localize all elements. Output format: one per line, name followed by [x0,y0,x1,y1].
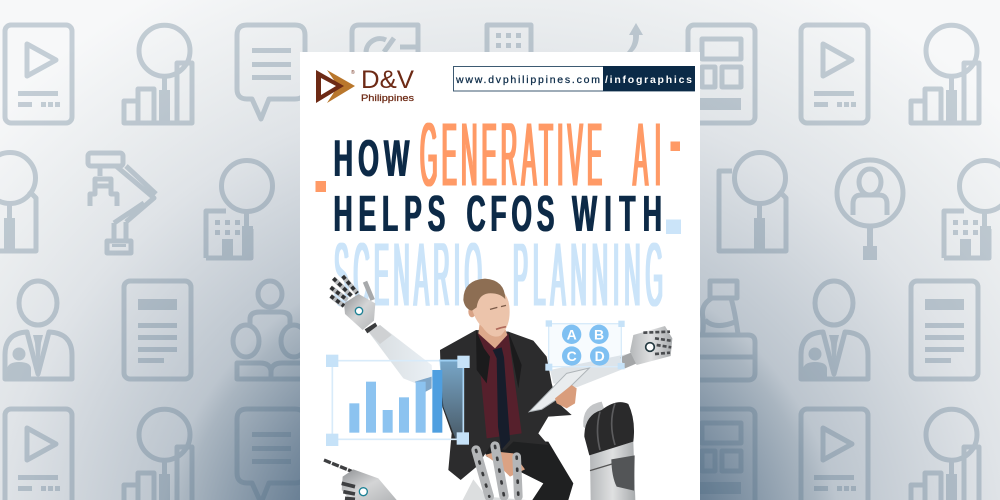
icon: target card, top centre [352,25,418,52]
icon: video document, row 4 [5,409,72,500]
icon: magnifier building, right [944,160,1000,260]
icon: magnifier building [206,160,272,260]
accent square: orange left [316,181,326,192]
title: AI: AI [633,105,661,205]
icon: growth arrow, top centre [626,23,643,53]
icon: business person, right [801,281,868,379]
title [334,105,663,325]
option D: D [595,348,605,364]
chart handles [326,355,470,446]
icon: layout document, row 1 [688,25,755,123]
logo: D&V Philippines [316,66,414,104]
url text: www.dvphilippines.com [455,74,600,86]
chart: scenario bar chart [326,355,470,446]
tie [493,347,510,450]
chart frame [332,361,463,439]
title: CFOS: CFOS [466,185,554,242]
lapels [476,330,522,388]
tablet and hand [529,368,589,412]
ear [468,306,476,317]
icon: building, top centre [487,25,531,52]
title: WITH: WITH [572,185,662,242]
bars [349,370,442,433]
icon: magnifier bar chart, row 1 right [911,25,979,125]
title: PLANNING: PLANNING [513,225,663,325]
icon: layout document, row 4 [688,409,755,500]
icon: text document [124,281,191,379]
robot hand: centre bottom [463,446,527,500]
accent square: orange right [670,142,680,151]
eyes and mouth [490,305,506,309]
icon: robot arm [88,153,156,253]
icon: magnifier bar chart, row 4 [124,409,192,500]
icon: speech bubble, row 4 [237,409,305,500]
icon: magnifier document, row 2 right [719,152,786,251]
face [470,287,510,337]
icon: business person [5,281,72,379]
title: HOW: HOW [334,128,410,187]
option C: C [567,348,577,364]
robot hand: pointing bottom left [324,460,397,500]
icon: video document, row 1 [5,25,72,123]
icon: speech bubble, row 1 [237,25,305,119]
jacket [440,330,572,480]
icon: magnifier document, row 2 left [0,152,36,251]
option B: B [594,326,604,342]
logo wordmark: D&V [361,66,414,94]
shirt [477,333,522,438]
title: HELPS: HELPS [334,185,445,242]
robot arm: upper left [331,276,433,394]
option A: A [567,326,577,342]
robot arm: right [550,326,672,387]
logo subtitle: Philippines [361,93,414,104]
icon: video document, row 4 right [801,409,868,500]
photo illustration: businessman with robot arms [324,276,672,500]
icon: team of people [233,281,307,379]
icon: video document, row 1 right [801,25,868,123]
chart overlay on jacket [439,359,464,440]
registered mark: ® [351,69,355,76]
hair [463,279,505,311]
icon: text document, right [911,281,978,379]
icon: logo arrows [316,70,355,103]
neck [478,320,507,348]
url box [454,66,695,91]
businessman [440,279,573,500]
title: GENERATIVE: GENERATIVE [420,105,602,205]
accent square: light blue [666,220,681,234]
title: SCENARIO: SCENARIO [334,225,482,325]
icon: magnifier bar chart, row 1 [124,25,192,125]
hand on knee [485,452,525,477]
multiple choice panel: A B C D [545,320,625,371]
icon: magnifier bar chart, row 4 right [911,409,979,500]
trousers [480,440,573,500]
panel: infographic page [300,52,700,500]
icon: magnifier person [837,160,903,260]
url path text: /infographics [605,74,692,86]
icon: hand on card [690,281,755,380]
robot fist and forearm [583,402,635,500]
